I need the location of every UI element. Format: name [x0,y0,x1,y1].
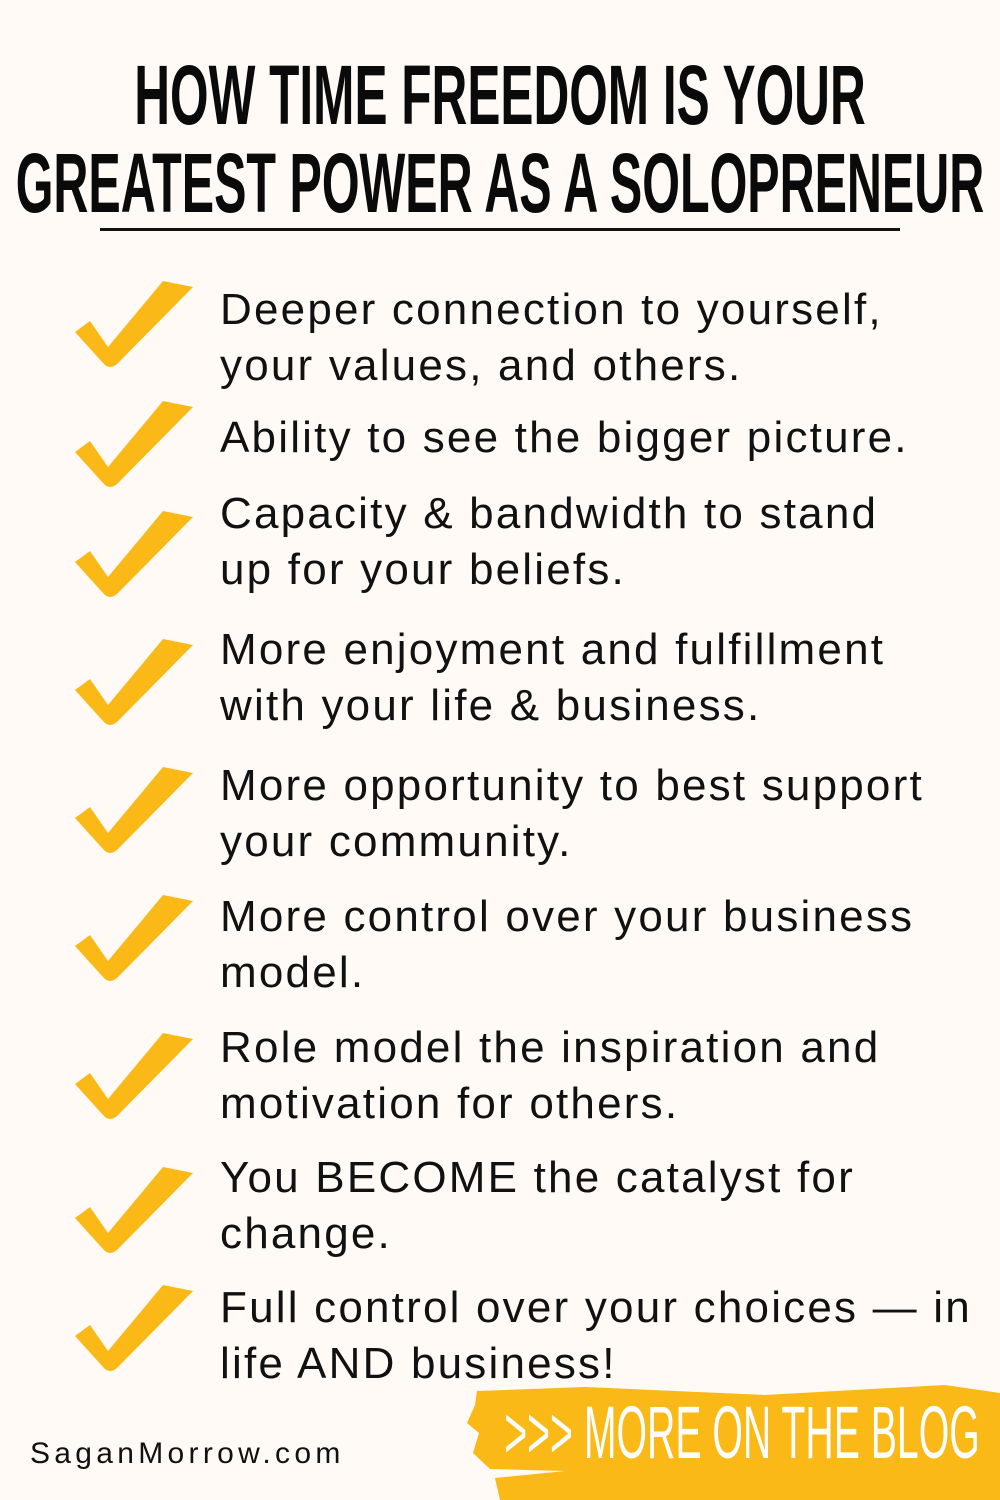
title: GREATEST POWER AS A SOLOPRENEUR [16,136,984,230]
item 5: More opportunity to best support [220,761,924,810]
icon: checkmark 4 [75,639,193,725]
item 1 [220,285,883,390]
item 9: Full control over your choices — in [220,1283,972,1332]
title [16,48,984,231]
item 9 [220,1283,972,1388]
item 6: model. [220,948,365,997]
item 8 [220,1153,855,1258]
item 8: change. [220,1209,392,1258]
item 4 [220,625,885,730]
item 3 [220,489,878,594]
item 5: your community. [220,817,572,866]
item 2: Ability to see the bigger picture. [220,413,909,462]
item 7: motivation for others. [220,1079,679,1128]
icon: checkmark 5 [75,767,193,853]
item 6 [220,892,914,997]
item 7: Role model the inspiration and [220,1023,880,1072]
title: HOW TIME FREEDOM IS YOUR [134,48,866,142]
item 4: More enjoyment and fulfillment [220,625,885,674]
icon: checkmark 6 [75,895,193,981]
item 5 [220,761,924,866]
item 1: your values, and others. [220,341,742,390]
item 3: Capacity & bandwidth to stand [220,489,878,538]
callout: more on the blog banner [467,1385,1000,1500]
item 8: You BECOME the catalyst for [220,1153,855,1202]
item 9: life AND business! [220,1339,617,1388]
item 3: up for your beliefs. [220,545,626,594]
item 6: More control over your business [220,892,914,941]
icon: checkmark 3 [75,511,193,597]
icon: checkmark 2 [75,401,193,487]
icon: checkmark 8 [75,1167,193,1253]
footer website: SaganMorrow.com [30,1437,345,1470]
item 7 [220,1023,880,1128]
icon: checkmark 1 [75,281,193,367]
icon: checkmark 9 [75,1285,193,1371]
icon: checkmark 7 [75,1033,193,1119]
item 1: Deeper connection to yourself, [220,285,883,334]
item 4: with your life & business. [220,681,761,730]
callout: more on the blog banner: >>> MORE ON THE BLOG [504,1391,980,1474]
